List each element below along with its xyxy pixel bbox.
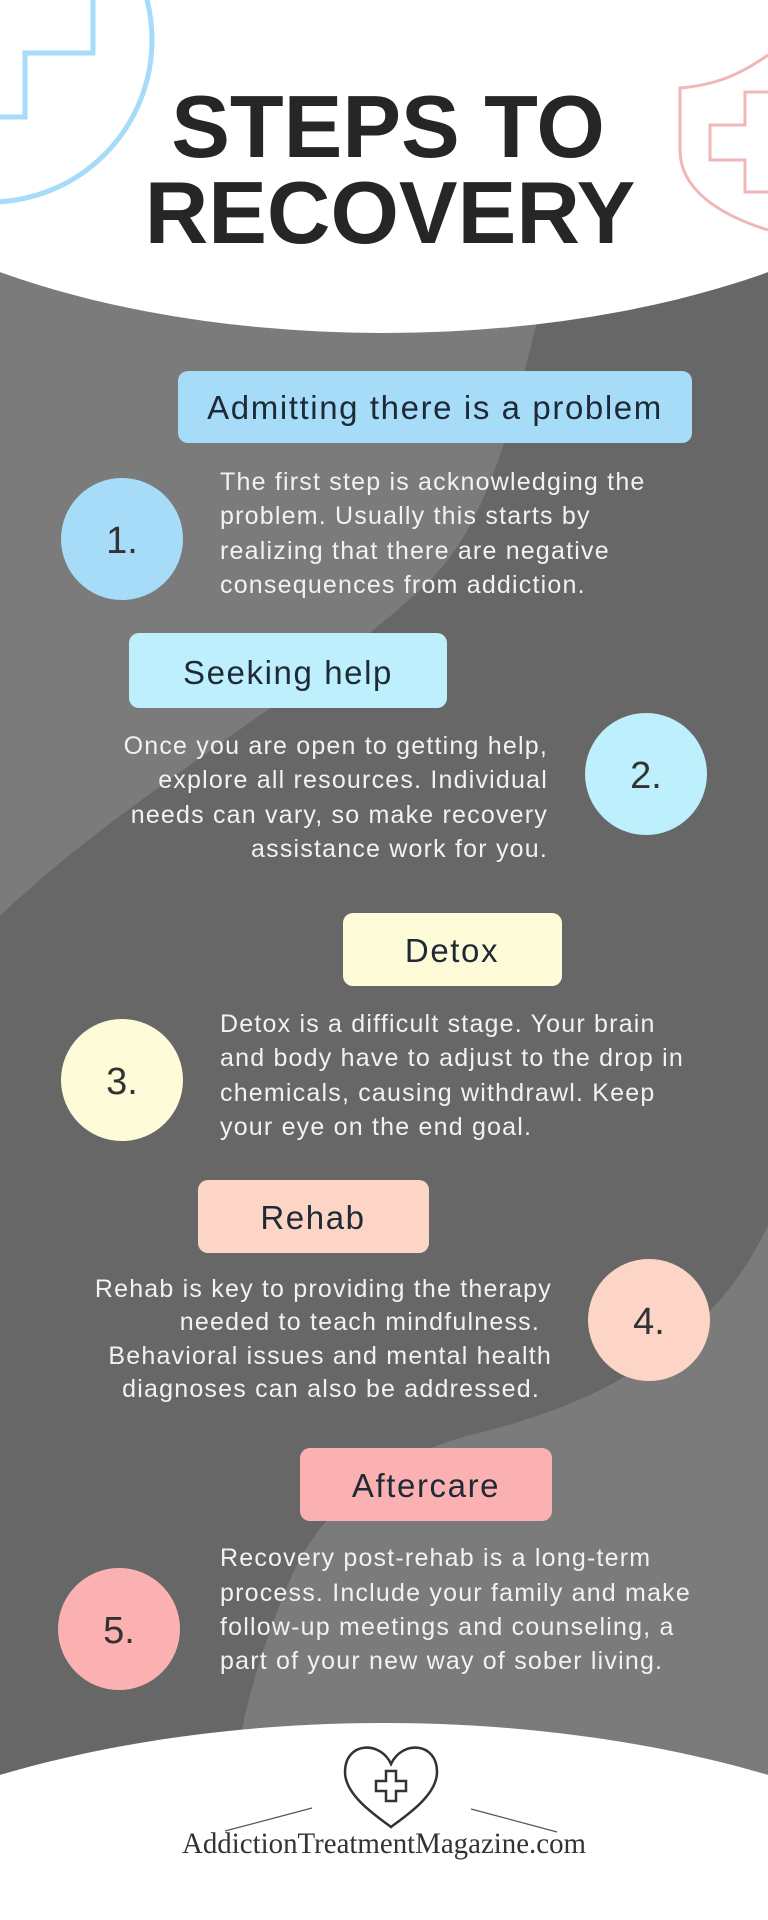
step 2 [124,633,707,863]
step 5: Aftercare [352,1467,500,1504]
step 1 [61,371,692,600]
step 2: needs can vary, so make recovery [131,801,548,829]
step 3: Detox [405,932,499,969]
step 5: Recovery post-rehab is a long-term [220,1544,651,1572]
icon: pink shield [680,55,768,230]
step 3: Detox is a difficult stage. Your brain [220,1010,656,1038]
header white shape [0,0,768,333]
step 3: and body have to adjust to the drop in [220,1044,684,1072]
step 3 [61,913,684,1141]
step 5: follow-up meetings and counseling, a [220,1613,675,1641]
step 4: Behavioral issues and mental health [108,1342,552,1370]
step 1: consequences from addiction. [220,571,586,599]
decorative lines [225,1808,557,1832]
step 1: 1. [106,520,138,562]
step 2: explore all resources. Individual [158,766,548,794]
step 5: process. Include your family and make [220,1579,691,1607]
step 5 [58,1448,691,1690]
icon: blue cross circle [0,0,152,202]
step 4: diagnoses can also be addressed. [122,1375,540,1403]
step 2: 2. [630,755,662,797]
step 3: 3. [106,1061,138,1103]
footer white shape [0,1723,768,1920]
step 2: Seeking help [183,654,393,691]
step 1: problem. Usually this starts by [220,502,591,530]
step 1: The first step is acknowledging the [220,468,646,496]
step 4: Rehab [260,1199,366,1236]
step 1: realizing that there are negative [220,537,610,565]
step 4: 4. [633,1301,665,1343]
step 3: your eye on the end goal. [220,1113,532,1141]
step 2: assistance work for you. [251,835,548,863]
icon: heart with cross [345,1748,437,1827]
title [145,77,635,262]
step 1: Admitting there is a problem [207,389,663,426]
step 5: part of your new way of sober living. [220,1647,663,1675]
step 4: Rehab is key to providing the therapy [95,1275,552,1303]
footer text: AddictionTreatmentMagazine.com [182,1827,586,1860]
title: STEPS TO [171,77,605,176]
step 5: 5. [103,1610,135,1652]
step 2: Once you are open to getting help, [124,732,548,760]
step 4: needed to teach mindfulness. [180,1308,540,1336]
title: RECOVERY [145,163,635,262]
step 4 [95,1180,710,1403]
step 3: chemicals, causing withdrawl. Keep [220,1079,655,1107]
